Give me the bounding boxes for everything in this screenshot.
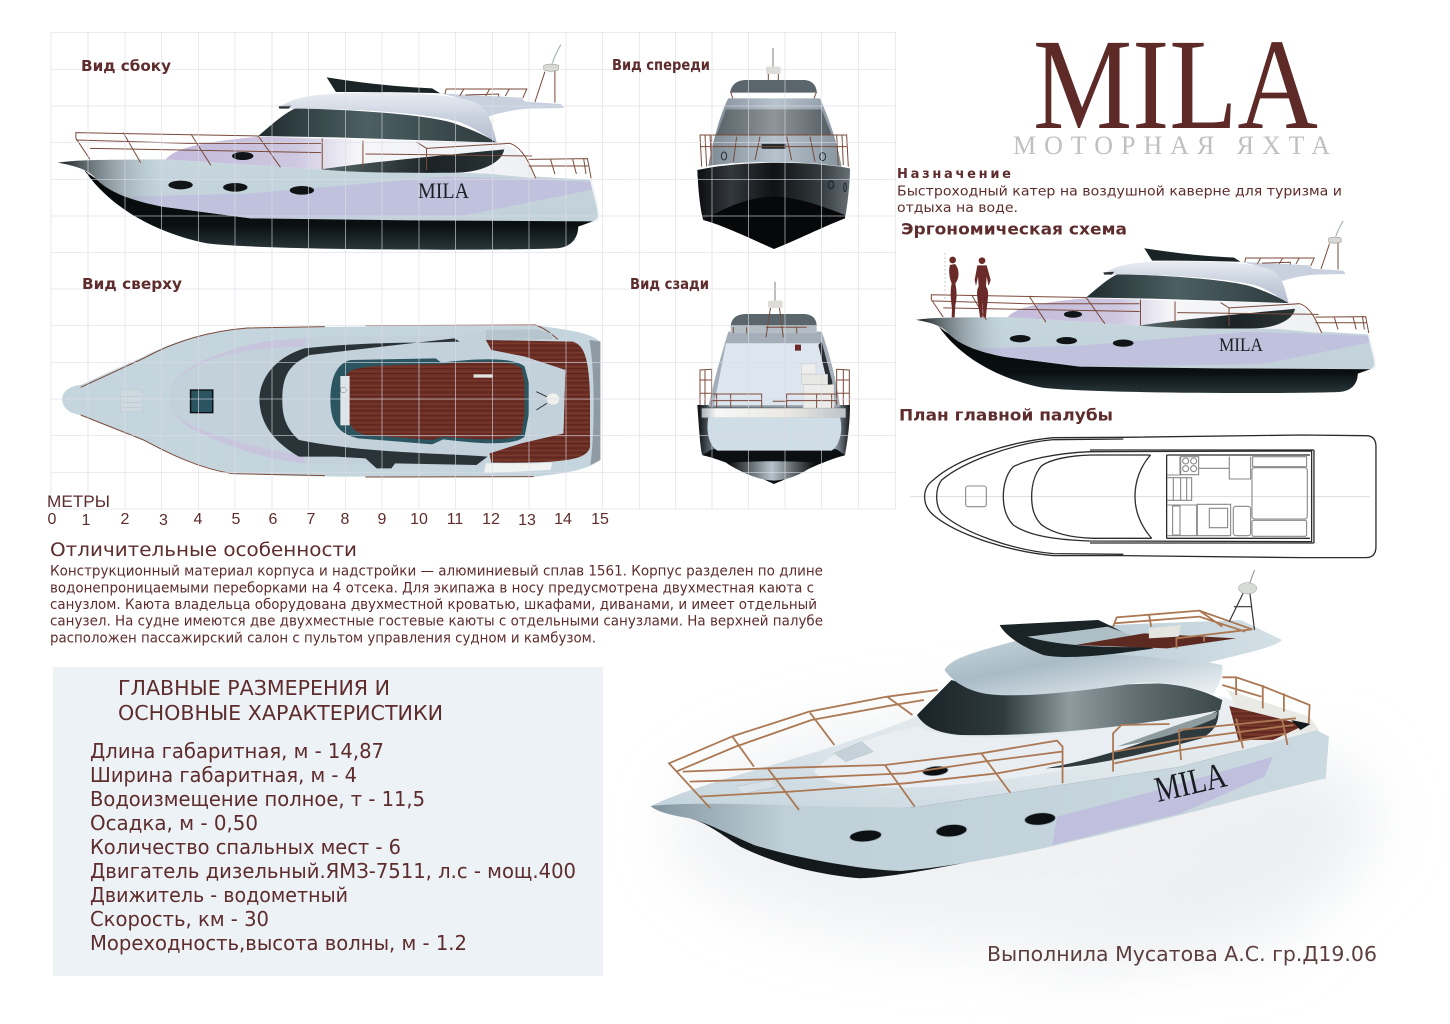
portholes: [849, 765, 1057, 843]
specification list: Количество спальных мест - 6: [90, 835, 401, 859]
specification list: Движитель - водометный: [90, 883, 348, 907]
main deck plan drawing: [910, 435, 1376, 558]
purpose text: Назначение: [897, 167, 1011, 182]
hull name: MILA: [1151, 755, 1230, 810]
panel title: ГЛАВНЫЕ РАЗМЕРЕНИЯ И: [118, 676, 390, 700]
far bow rail: [669, 690, 938, 808]
windows: [917, 680, 1222, 735]
ergonomic yacht with human figures: [916, 221, 1375, 393]
ergonomic yacht with human figures: MILA: [1219, 335, 1263, 356]
aft rails: [1113, 677, 1310, 772]
front view: yacht: [697, 48, 850, 249]
rear view: yacht: [697, 282, 850, 484]
scale label and numbers: 13: [518, 512, 536, 529]
scale label and numbers: 14: [554, 511, 572, 528]
hull side: [651, 730, 1329, 871]
specification list: Двигатель дизельный.ЯМЗ-7511, л.с - мощ.400: [90, 859, 576, 883]
heading: distinctive features: Отличительные особенности: [50, 539, 357, 561]
text block: distinctive features: [50, 564, 823, 646]
3D yacht render with shadow: [651, 570, 1390, 985]
purpose text: Быстроходный катер на воздушной каверне для туризма и: [897, 184, 1342, 200]
scale label and numbers: 6: [269, 511, 278, 528]
heading: ergonomic scheme: Эргономическая схема: [901, 220, 1127, 238]
text block: distinctive features: Конструкционный материал корпуса и надстройки — алюминиевый сплав 1561. Корпус разделен по длине: [50, 564, 823, 580]
logo: MILA: [1033, 13, 1318, 157]
top view: yacht: [62, 325, 600, 477]
panel: main dimensions: [53, 667, 603, 976]
human figures: [949, 257, 991, 317]
side view: yacht: [58, 45, 599, 250]
scale label and numbers: 5: [232, 511, 241, 528]
flybridge rail: [1113, 611, 1252, 648]
specification list: Осадка, м - 0,50: [90, 811, 258, 835]
specification list: Мореходность,высота волны, м - 1.2: [90, 931, 467, 955]
scale label and numbers: 11: [447, 511, 463, 528]
text block: distinctive features: санузел. На судне имеются две двухместные гостевые каюты с отдельными санузлами. На верхней палубе: [50, 614, 823, 630]
scale label and numbers: 1: [82, 512, 91, 529]
hull name: MILA: [418, 178, 469, 203]
purpose text: отдыха на воде.: [897, 200, 1018, 216]
roof: [945, 638, 1222, 695]
panel title: [118, 676, 443, 725]
author credit: Выполнила Мусатова А.С. гр.Д19.06: [987, 942, 1377, 966]
aft cockpit: [1227, 690, 1319, 740]
heading: top view: Вид сверху: [82, 275, 182, 293]
text block: distinctive features: расположен пассажирский салон с пультом управления судном и камбузом.: [50, 630, 596, 646]
scale label and numbers: МЕТРЫ: [47, 492, 110, 511]
scale label and numbers: 10: [410, 511, 428, 528]
scale label and numbers: 12: [482, 511, 500, 528]
specification list: [90, 739, 576, 955]
measuring grid: [51, 32, 896, 509]
scale label and numbers: 8: [341, 511, 350, 528]
specification list: Скорость, км - 30: [90, 907, 269, 931]
heading: side view: Вид сбоку: [81, 57, 171, 75]
purpose text: [897, 167, 1342, 216]
heading: front view: Вид спереди: [612, 56, 710, 74]
panel title: ОСНОВНЫЕ ХАРАКТЕРИСТИКИ: [118, 701, 443, 725]
specification list: Длина габаритная, м - 14,87: [90, 739, 384, 763]
scale label and numbers: 3: [159, 512, 168, 529]
scale label and numbers: 0: [48, 511, 57, 528]
heading: rear view: Вид сзади: [630, 275, 709, 293]
deck: [651, 697, 1317, 807]
text block: distinctive features: санузлом. Каюта владельца оборудована двухместной кроватью, шкафами, диванами, и имеет отдельный: [50, 597, 817, 613]
keel: [690, 737, 1328, 878]
text block: distinctive features: водонепроницаемыми переборками на 4 отсека. Для экипажа в носу предусмотрена двухместная каюта с: [50, 580, 814, 596]
near bow rail: [683, 741, 1063, 810]
flybridge: [1020, 620, 1282, 665]
scale label and numbers: 9: [378, 511, 387, 528]
scale label and numbers: 15: [591, 511, 609, 528]
scale label and numbers: [47, 492, 609, 529]
scale label and numbers: 2: [121, 511, 130, 528]
subtitle: МОТОРНАЯ ЯХТА: [1013, 131, 1330, 160]
scale label and numbers: 4: [194, 511, 203, 528]
scale label and numbers: 7: [307, 511, 316, 528]
specification list: Водоизмещение полное, т - 11,5: [90, 787, 425, 811]
specification list: Ширина габаритная, м - 4: [90, 763, 357, 787]
heading: main deck plan: План главной палубы: [899, 406, 1113, 424]
